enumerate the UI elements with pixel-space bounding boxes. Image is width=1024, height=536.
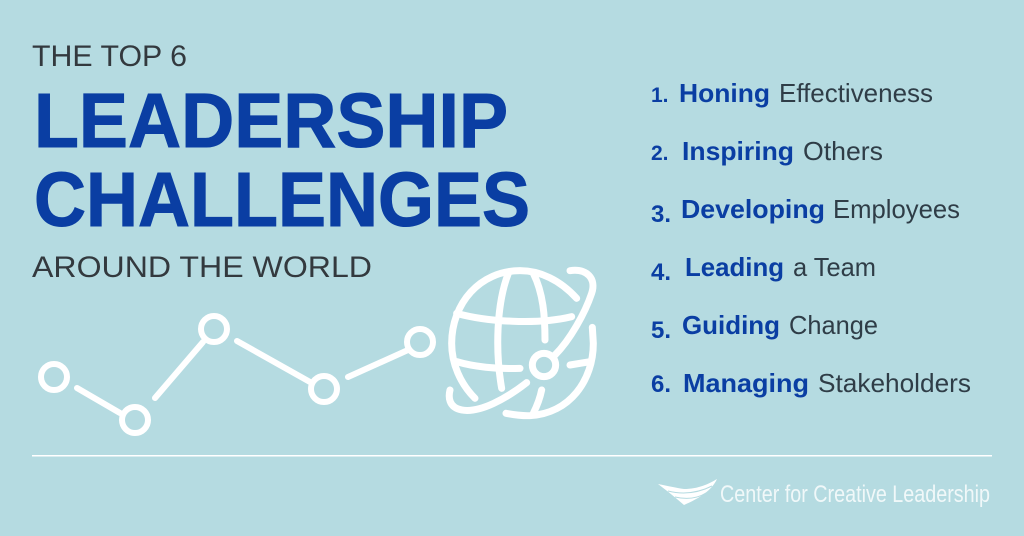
item 5 — [651, 310, 878, 344]
item 1: Honing — [679, 78, 770, 108]
icon: globe — [449, 270, 593, 416]
item 6 — [651, 368, 971, 398]
heading: the top 6: THE TOP 6 — [32, 40, 187, 73]
heading: around the world: AROUND THE WORLD — [32, 251, 372, 284]
title — [32, 40, 530, 284]
heading: leadership: LEADERSHIP — [34, 78, 508, 164]
item 4 — [651, 252, 876, 286]
item 2: Others — [803, 136, 883, 166]
item 6: Managing — [683, 368, 809, 398]
item 5: 5. — [651, 317, 671, 344]
item 1: 1. — [651, 84, 669, 107]
item 2: Inspiring — [682, 136, 794, 166]
item 3 — [651, 194, 960, 228]
list of challenges — [651, 78, 971, 398]
heading: challenges: CHALLENGES — [34, 157, 530, 243]
item 3: Developing — [681, 194, 825, 224]
item 2: 2. — [651, 142, 669, 165]
item 4: 4. — [651, 259, 671, 286]
item 2 — [651, 136, 883, 166]
item 3: 3. — [651, 201, 671, 228]
item 4: a Team — [793, 252, 876, 282]
item 5: Guiding — [682, 310, 780, 340]
item 6: Stakeholders — [818, 368, 971, 398]
item 1 — [651, 78, 933, 108]
icon: swoosh — [658, 479, 717, 505]
logo: center for creative leadership — [658, 479, 990, 508]
item 5: Change — [789, 310, 878, 340]
line chart icon — [41, 316, 433, 433]
item 4: Leading — [685, 252, 784, 282]
item 3: Employees — [833, 194, 960, 224]
item 6: 6. — [651, 371, 671, 398]
item 1: Effectiveness — [779, 78, 933, 108]
